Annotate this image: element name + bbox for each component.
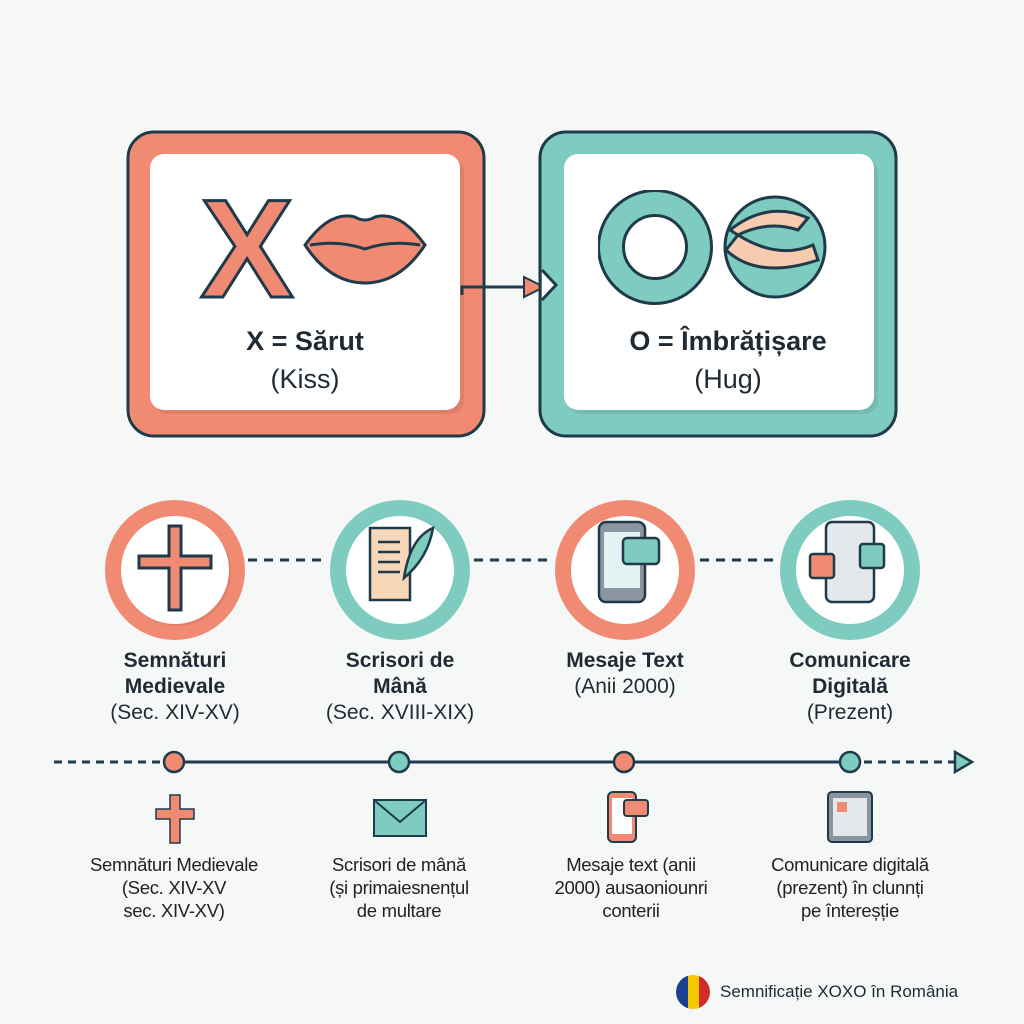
icon circle: phone xyxy=(555,500,695,640)
panel: kiss xyxy=(126,130,486,438)
text: (Prezent) xyxy=(807,701,893,724)
text: Mesaje Text xyxy=(566,649,684,672)
arrow: X to O xyxy=(460,275,538,299)
text: pe întereșție xyxy=(801,900,899,921)
text: era titles xyxy=(110,649,240,724)
text: era descriptions: Semnături Medievale xyxy=(90,854,258,875)
icon: O letter xyxy=(598,190,713,305)
text: de multare xyxy=(357,900,441,921)
text: (Sec. XVIII-XIX) xyxy=(326,701,474,724)
text: era titles: Semnături xyxy=(124,649,226,672)
text: Scrisori de mână xyxy=(332,854,466,875)
text: (prezent) în clunnți xyxy=(776,877,924,898)
icon circle: scroll xyxy=(330,500,470,640)
text: hug label: O = Îmbrățișare xyxy=(629,326,827,356)
connectors: dashed xyxy=(248,558,773,562)
text: 2000) ausaoniounri xyxy=(554,877,708,898)
text: Comunicare digitală xyxy=(771,854,929,875)
icon: hug xyxy=(724,196,826,298)
text: Mână xyxy=(373,675,427,698)
text: era descriptions: sec. XIV-XV) xyxy=(123,900,225,921)
text: era descriptions: (Sec. XIV-XV xyxy=(122,877,226,898)
text: (Anii 2000) xyxy=(574,675,676,698)
text: (și primaiesnențul xyxy=(329,877,469,898)
text: Scrisori de xyxy=(346,649,454,672)
timeline xyxy=(54,750,974,774)
icon: lips xyxy=(303,214,427,284)
footer xyxy=(676,975,958,1009)
text: Comunicare xyxy=(789,649,911,672)
text: conterii xyxy=(602,900,660,921)
text: kiss label: X = Sărut xyxy=(246,326,364,356)
text: era titles: (Sec. XIV-XV) xyxy=(110,701,240,724)
text: era descriptions xyxy=(90,854,258,921)
text: era titles: Medievale xyxy=(125,675,225,698)
panel: hug xyxy=(538,130,898,438)
small icons xyxy=(155,794,195,844)
text: hug label xyxy=(629,326,827,394)
footer: Semnificație XOXO în România xyxy=(720,982,958,1001)
text: kiss label xyxy=(246,326,364,394)
text: Mesaje text (anii xyxy=(566,854,696,875)
icon circle: digital xyxy=(780,500,920,640)
text: kiss label: (Kiss) xyxy=(270,364,340,394)
text: Digitală xyxy=(812,675,888,698)
icon circle: cross xyxy=(105,500,245,640)
text: hug label: (Hug) xyxy=(694,364,762,394)
